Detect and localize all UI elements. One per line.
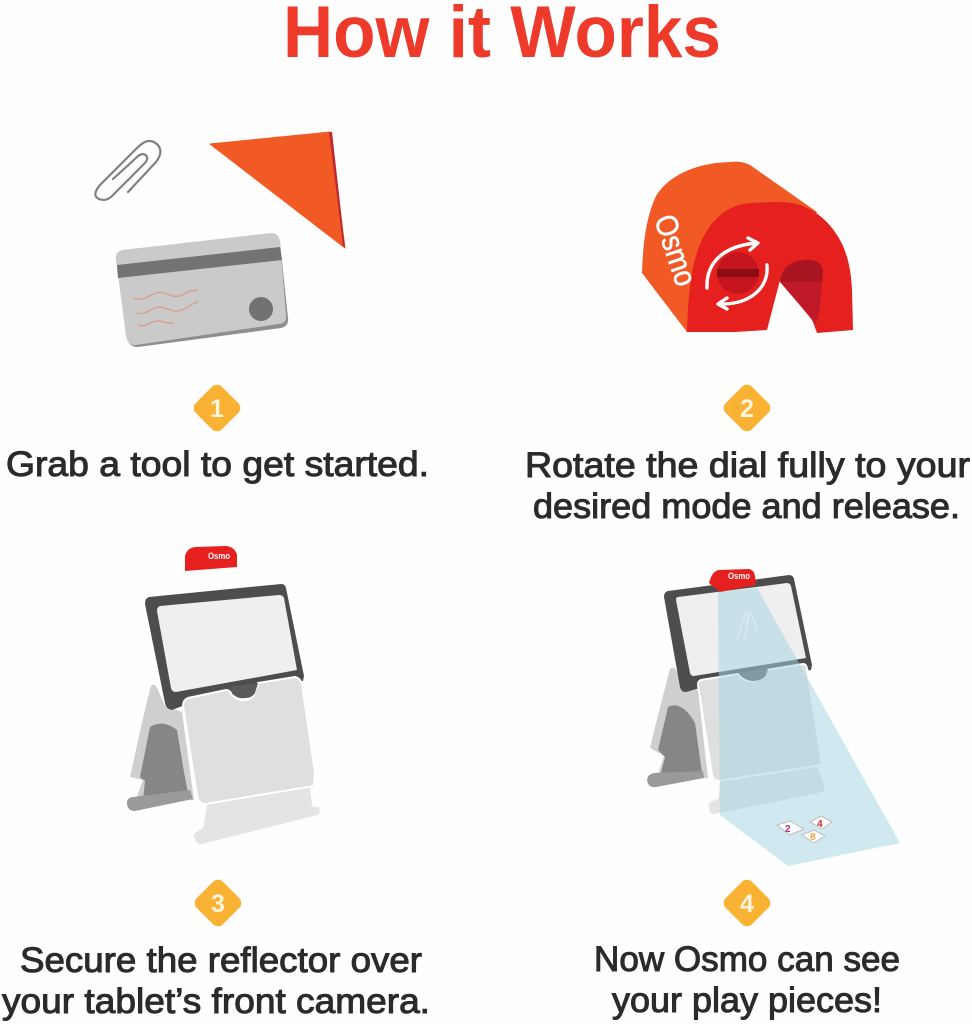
caption: step 3: Secure the reflector over	[20, 941, 422, 980]
icon: Osmo reflector clip: Osmo	[728, 571, 750, 581]
play piece 4: 4	[817, 819, 823, 830]
step badge 2	[721, 382, 773, 434]
caption: step 1: Grab a tool to get started.	[6, 445, 429, 484]
panel: step 2	[525, 162, 970, 526]
panel: step 1	[6, 132, 429, 484]
caption: step 4: your play pieces!	[612, 981, 882, 1020]
play piece 8: 8	[810, 832, 816, 843]
icon: Osmo reflector clip	[185, 546, 237, 571]
icon: Osmo dial	[642, 162, 853, 333]
play piece 2: 2	[785, 824, 791, 835]
step badge 3	[192, 877, 244, 929]
step badge 2: 2	[740, 395, 754, 423]
step badge 4: 4	[740, 890, 754, 918]
faint reflected pieces on screen	[737, 612, 758, 640]
caption: step 2: Rotate the dial fully to your	[525, 446, 970, 485]
icon: reflector plate	[183, 677, 320, 845]
light beam	[718, 588, 900, 866]
icon: paperclip	[95, 141, 160, 200]
caption: step 2	[525, 446, 970, 526]
icon: Osmo dial: Osmo	[647, 210, 704, 290]
step badge 1: 1	[210, 395, 224, 423]
panel: step 3	[2, 546, 430, 1021]
icon: tablet	[664, 575, 812, 692]
icon: tablet	[145, 584, 304, 710]
icon: credit card	[116, 233, 288, 347]
panel: step 4	[594, 569, 900, 1020]
icon: Osmo reflector clip	[709, 569, 756, 592]
icon: Osmo reflector clip: Osmo	[208, 551, 230, 561]
caption: step 3: your tablet’s front camera.	[2, 982, 430, 1021]
caption: step 3	[2, 941, 430, 1021]
caption: step 4: Now Osmo can see	[594, 940, 900, 979]
step badge 1	[191, 382, 243, 434]
play pieces	[777, 816, 832, 843]
icon: tablet stand	[647, 668, 708, 787]
icon: tablet stand	[127, 685, 194, 811]
icon: reflector plate	[698, 664, 825, 815]
caption: step 4	[594, 940, 900, 1020]
caption: step 2: desired mode and release.	[533, 487, 960, 526]
step badge 3: 3	[211, 890, 225, 918]
icon: orange triangle tool	[210, 132, 345, 248]
step badge 4	[721, 877, 773, 929]
